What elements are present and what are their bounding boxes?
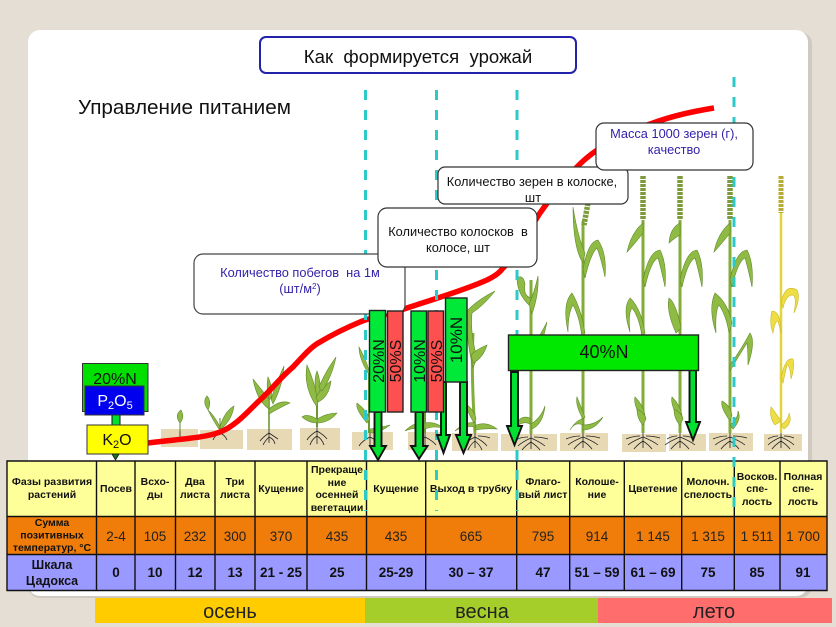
row: sum of temperatures: 2-4 (106, 529, 126, 544)
row: sum of temperatures (13, 517, 820, 554)
arrow: 10%N second right (456, 382, 471, 453)
row: Zadoks scale: 12 (187, 565, 203, 580)
bar: 50%S second: 50%S (429, 340, 446, 382)
row: Zadoks scale: 51 – 59 (574, 565, 620, 580)
row: growth phases: спе- (792, 483, 814, 495)
season: autumn: осень (203, 601, 257, 623)
row: Zadoks scale: 85 (749, 565, 765, 580)
plant: earing (626, 176, 665, 449)
row: sum of temperatures: 435 (326, 529, 348, 544)
callout: grains per ear (438, 167, 628, 205)
row: Zadoks scale (26, 558, 811, 588)
callout: shoots per square metre (194, 254, 405, 314)
callout: shoots per square metre: Количество побегов на 1м (220, 265, 380, 280)
row: sum of temperatures: Сумма (35, 517, 69, 529)
row: growth phases: ние (588, 489, 606, 501)
row: growth phases: Кущение (258, 483, 304, 495)
row: growth phases: лость (742, 496, 773, 508)
bar: 40%N: 40%N (579, 342, 629, 362)
row: growth phases: спелость (684, 489, 733, 501)
row: Zadoks scale: Шкала (32, 558, 73, 572)
row: Zadoks scale: 47 (535, 565, 551, 580)
row: growth phases: Три (226, 476, 244, 488)
row: sum of temperatures: 232 (184, 529, 206, 544)
row: growth phases: ние (328, 477, 346, 489)
table grid (7, 461, 827, 590)
autumn fertiliser stack (82, 364, 148, 460)
plant: two leaves (253, 366, 290, 445)
row: sum of temperatures: температур, °С (13, 542, 92, 554)
row: growth phases: листа (180, 489, 210, 501)
row: growth phases: Два (185, 476, 205, 488)
row: Zadoks scale: 30 – 37 (448, 565, 494, 580)
row: growth phases: Флаго- (525, 476, 561, 488)
season: summer: лето (693, 601, 735, 623)
yield curve (148, 108, 714, 443)
row: sum of temperatures: 914 (586, 529, 609, 544)
row: Zadoks scale: Цадокса (26, 574, 79, 588)
plant: spring tillering (405, 403, 445, 447)
callout: spikelets per ear (378, 208, 537, 267)
row: growth phases: вый лист (519, 489, 567, 501)
fertiliser box: K2O: O (119, 432, 132, 449)
row: sum of temperatures: 435 (385, 529, 407, 544)
fertiliser box: P2O5: O (114, 393, 127, 410)
row: sum of temperatures: 300 (224, 529, 246, 544)
callout: grains per ear: шт (525, 190, 541, 205)
callout: grains per ear: Количество зерен в колоске, (447, 174, 617, 189)
row: growth phases: Посев (100, 483, 133, 495)
row: growth phases: растений (28, 489, 76, 501)
title box: Как формируется урожай (304, 46, 532, 67)
callout: thousand-grain mass (596, 123, 753, 170)
table row fills (7, 461, 827, 590)
season: summer (598, 598, 832, 623)
plant: milk ripeness (712, 176, 753, 449)
plant: stem elongation (455, 291, 497, 450)
row: growth phases: Кущение (373, 483, 419, 495)
soil strips (161, 428, 802, 452)
callout: shoots per square metre: ) (316, 281, 321, 296)
row: sum of temperatures: 1 315 (691, 529, 725, 544)
row: Zadoks scale: 13 (227, 565, 243, 580)
arrow: 40%N left (507, 372, 522, 445)
row: growth phases: Прекраще (311, 464, 363, 476)
row: Zadoks scale: 25-29 (379, 565, 413, 580)
plant: full ripeness (768, 176, 798, 449)
row: sum of temperatures: 105 (144, 529, 166, 544)
season bar (95, 598, 832, 623)
callout: shoots per square metre: (шт/м (279, 281, 312, 296)
callout: spikelets per ear: колосе, шт (426, 240, 490, 255)
fertiliser box: K2O: 2 (113, 439, 119, 451)
row: growth phases: спе- (746, 483, 768, 495)
bar: 10%N second: 10%N (447, 317, 466, 363)
row: growth phases: Фазы развития (12, 476, 92, 488)
row: Zadoks scale: 75 (700, 565, 716, 580)
fertiliser box: K2O (87, 425, 148, 454)
row: sum of temperatures: 795 (532, 529, 554, 544)
plant: emergence (205, 396, 234, 440)
row: growth phases: осенней (316, 489, 358, 501)
plant: one leaf (177, 410, 183, 439)
fertiliser box: P2O5: 5 (127, 400, 133, 412)
row: Zadoks scale: 61 – 69 (630, 565, 676, 580)
bar: 50%S first: 50%S (388, 340, 405, 382)
dashed stage lines (366, 77, 734, 511)
row: sum of temperatures: позитивных (20, 530, 84, 542)
callout: thousand-grain mass: Масса 1000 зерен (г), (610, 126, 738, 141)
bar: 20%N: 20%N (371, 339, 388, 383)
row: sum of temperatures: 665 (460, 529, 482, 544)
row: growth phases: Полная (784, 471, 822, 483)
callout: shoots per square metre: 2 (312, 282, 317, 291)
row: growth phases: Колоше- (575, 476, 619, 488)
connector (112, 414, 120, 426)
fertiliser box: P2O5: 2 (108, 400, 114, 412)
row: Zadoks scale: 10 (147, 565, 163, 580)
arrow: 20%N tillering (370, 412, 386, 460)
plant: tillering (357, 347, 390, 447)
season: spring: весна (455, 601, 510, 623)
row: Zadoks scale: 91 (795, 565, 811, 580)
row: growth phases: лость (788, 496, 819, 508)
row: growth phases: Всхо- (141, 476, 170, 488)
row: Zadoks scale: 21 - 25 (260, 565, 303, 580)
bar: 10%N first (411, 311, 429, 412)
row: Zadoks scale: 25 (329, 565, 345, 580)
fertiliser box: P2O5 (85, 386, 144, 415)
arrow: 10%N second left (437, 382, 450, 453)
plant: three leaves (302, 357, 337, 445)
row: sum of temperatures: 1 145 (636, 529, 670, 544)
row: growth phases: листа (220, 489, 250, 501)
row: growth phases: вегетации (311, 502, 363, 514)
row: Zadoks scale: 0 (112, 565, 120, 580)
plant growth stages (161, 176, 802, 452)
bar: 10%N first: 10%N (412, 339, 429, 383)
fertiliser box: 20%N: 20%N (93, 371, 137, 388)
fertiliser box: K2O: K (102, 432, 113, 449)
row: growth phases: Молочн. (687, 476, 730, 488)
subtitle: Управление питанием (78, 96, 291, 119)
plant: flag leaf (515, 276, 548, 450)
row: sum of temperatures: 370 (270, 529, 292, 544)
fertiliser box: P2O5: P (97, 393, 108, 410)
bar: 10%N second (446, 298, 467, 382)
arrow: 10%N first (411, 412, 428, 459)
arrow: 40%N right (686, 370, 700, 440)
row: growth phases (12, 464, 822, 514)
bar: 50%S first (388, 311, 405, 412)
small arrow (112, 454, 119, 460)
plant: flowering (665, 176, 702, 449)
season: spring (365, 598, 598, 623)
bar: 40%N (508, 335, 698, 370)
row: growth phases: ды (147, 489, 163, 501)
phase table (7, 461, 827, 590)
title box (260, 37, 576, 73)
season: autumn (95, 598, 365, 623)
row: sum of temperatures: 1 700 (786, 529, 820, 544)
callout: thousand-grain mass: качество (648, 142, 700, 157)
row: growth phases: Восков. (737, 471, 777, 483)
bar: 20%N (370, 310, 388, 412)
bar: 50%S second (428, 311, 446, 412)
row: sum of temperatures: 1 511 (741, 529, 773, 544)
plant: heading stage (566, 203, 605, 449)
callout: spikelets per ear: Количество колосков в (388, 224, 528, 239)
row: growth phases: Выход в трубку (430, 483, 512, 495)
row: growth phases: Цветение (628, 483, 678, 495)
